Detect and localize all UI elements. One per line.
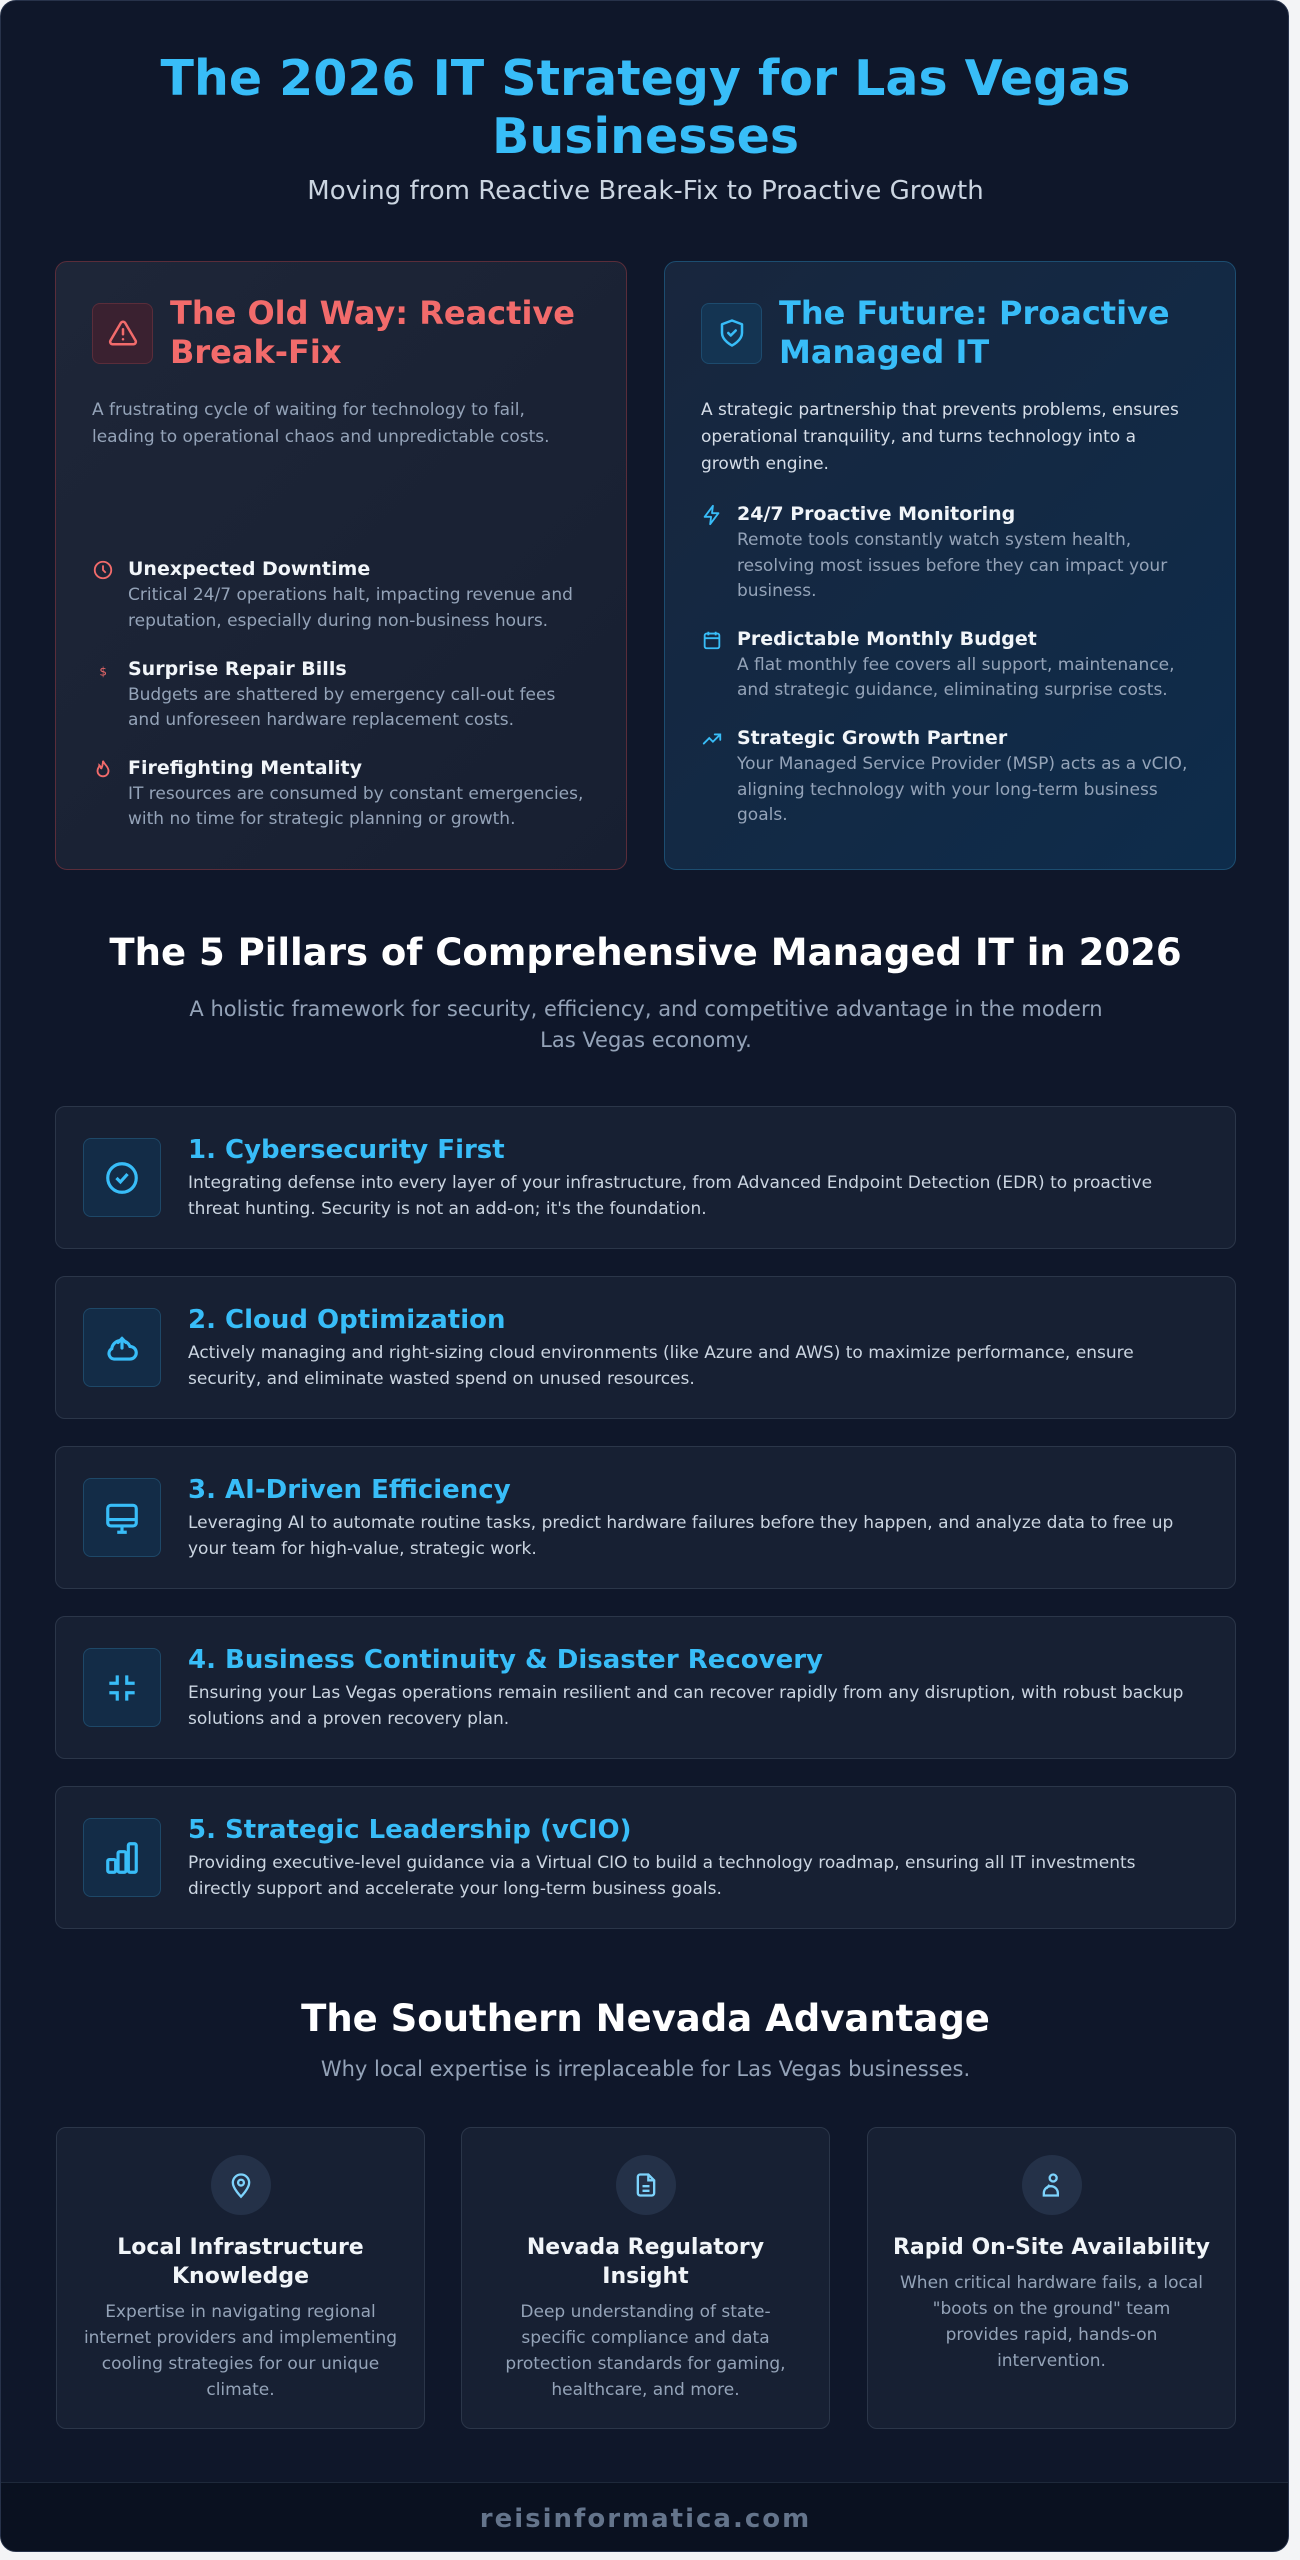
pillar 2 <box>55 1276 1236 1419</box>
item: budget: A flat monthly fee covers all support, maintenance, and strategic guidance, eliminating surprise costs. <box>737 655 1175 700</box>
icon: warning <box>92 302 153 364</box>
item: growth: Strategic Growth Partner <box>737 727 1007 749</box>
card: on-site: "boots on the ground" team <box>933 2299 1170 2319</box>
pillar 1: 1. Cybersecurity First <box>188 1135 505 1165</box>
card: local infrastructure: cooling strategies for our unique <box>102 2354 379 2374</box>
card: local infrastructure <box>56 2127 425 2429</box>
pillar 4: 4. Business Continuity & Disaster Recovery <box>188 1645 823 1675</box>
item: firefighting: IT resources are consumed by constant emergencies, with no time for strategic planning or growth. <box>128 784 583 829</box>
card: on-site: intervention. <box>997 2351 1106 2371</box>
title: Businesses <box>492 108 799 165</box>
item: repair bills <box>99 658 555 730</box>
pillar 4 <box>55 1616 1236 1759</box>
pillar 5 <box>55 1786 1236 1929</box>
card: local infrastructure: Knowledge <box>172 2264 309 2289</box>
future description: A strategic partnership that prevents problems, ensures operational tranquility, and turns technology into a growth engine. <box>701 400 1179 474</box>
item: downtime: Critical 24/7 operations halt, impacting revenue and reputation, especially during non-business hours. <box>128 585 573 631</box>
title <box>160 50 1130 165</box>
item: firefighting: Firefighting Mentality <box>128 757 362 779</box>
pillar 2: Actively managing and right-sizing cloud environments (like Azure and AWS) to maximize performance, ensure security, and eliminate wasted spend on unused resources. <box>188 1343 1134 1389</box>
pillar 1: Integrating defense into every layer of your infrastructure, from Advanced Endpoint Detection (EDR) to proactive threat hunting. Security is not an add-on; it's the foundation. <box>188 1173 1152 1219</box>
item: monitoring: 24/7 Proactive Monitoring <box>737 503 1015 525</box>
future list <box>702 503 1187 825</box>
subtitle: Moving from Reactive Break-Fix to Proactive Growth <box>307 176 984 206</box>
panel: future <box>664 261 1236 870</box>
icon: recover <box>83 1648 161 1727</box>
item: repair bills: Surprise Repair Bills <box>128 658 347 680</box>
pillars subtitle <box>189 997 1103 1052</box>
icon: bar chart <box>83 1818 161 1897</box>
old way header: The Old Way: Reactive Break-Fix <box>170 294 575 371</box>
pillars subtitle: Las Vegas economy. <box>540 1028 752 1052</box>
card: local infrastructure: Expertise in navigating regional <box>105 2302 376 2322</box>
card: regulatory: Insight <box>602 2264 689 2289</box>
old way list <box>94 558 583 829</box>
future header: The Future: Proactive Managed IT <box>779 294 1170 371</box>
pillar 1 <box>55 1106 1236 1249</box>
heading: advantage: The Southern Nevada Advantage <box>301 1997 990 2040</box>
card: regulatory: healthcare, and more. <box>551 2380 740 2400</box>
item: firefighting <box>96 757 583 829</box>
pillar 3 <box>55 1446 1236 1589</box>
item: monitoring <box>704 503 1168 601</box>
title: The 2026 IT Strategy for Las Vegas <box>161 50 1130 107</box>
card: local infrastructure: internet providers and implementing <box>84 2328 397 2348</box>
card: on-site <box>867 2127 1236 2429</box>
item: budget: Predictable Monthly Budget <box>737 628 1037 650</box>
item: downtime <box>94 558 573 631</box>
footer: reisinformatica.com <box>480 2504 811 2534</box>
icon: document <box>616 2155 676 2215</box>
icon: check <box>83 1138 161 1217</box>
footer <box>1 2482 1290 2554</box>
pillar 5: 5. Strategic Leadership (vCIO) <box>188 1815 632 1845</box>
icon: person <box>1022 2155 1082 2215</box>
card: regulatory: Nevada Regulatory <box>527 2235 764 2260</box>
card: regulatory <box>461 2127 830 2429</box>
card: on-site: provides rapid, hands-on <box>946 2325 1157 2345</box>
item: monitoring: Remote tools constantly watch system health, resolving most issues before they can impact your business. <box>737 530 1167 601</box>
item: budget <box>704 628 1175 700</box>
item: downtime: Unexpected Downtime <box>128 558 370 580</box>
card: regulatory: protection standards for gaming, <box>505 2354 786 2374</box>
item: growth <box>702 727 1187 825</box>
icon: shield <box>701 302 762 364</box>
card: regulatory: specific compliance and data <box>521 2328 770 2348</box>
heading: pillars: The 5 Pillars of Comprehensive Managed IT in 2026 <box>109 931 1182 974</box>
item: repair bills: Budgets are shattered by emergency call-out fees and unforeseen hardware replacement costs. <box>128 685 555 730</box>
card: local infrastructure: climate. <box>206 2380 275 2400</box>
icon: pin <box>210 2155 270 2215</box>
item: repair bills: $ <box>99 664 107 678</box>
card: on-site: Rapid On-Site Availability <box>893 2235 1210 2260</box>
pillars subtitle: A holistic framework for security, efficiency, and competitive advantage in the modern <box>189 997 1103 1021</box>
icon: monitor <box>83 1478 161 1557</box>
card: regulatory: Deep understanding of state- <box>520 2302 771 2322</box>
icon: cloud <box>83 1308 161 1387</box>
pillar 5: Providing executive-level guidance via a Virtual CIO to build a technology roadmap, ensuring all IT investments directly support and accelerate your long-term business goals. <box>188 1853 1135 1899</box>
card: on-site: When critical hardware fails, a local <box>900 2273 1203 2293</box>
item: growth: Your Managed Service Provider (MSP) acts as a vCIO, aligning technology with your long-term business goals. <box>737 754 1187 825</box>
old way description: A frustrating cycle of waiting for technology to fail, leading to operational chaos and unpredictable costs. <box>92 400 550 447</box>
card: local infrastructure: Local Infrastructure <box>117 2235 364 2260</box>
pillar 4: Ensuring your Las Vegas operations remain resilient and can recover rapidly from any disruption, with robust backup solutions and a proven recovery plan. <box>188 1683 1183 1729</box>
panel: old way <box>55 261 627 870</box>
advantage subtitle: Why local expertise is irreplaceable for Las Vegas businesses. <box>321 2057 970 2081</box>
pillar 3: 3. AI-Driven Efficiency <box>188 1475 511 1505</box>
pillar 3: Leveraging AI to automate routine tasks, predict hardware failures before they happen, and analyze data to free up your team for high-value, strategic work. <box>188 1513 1173 1559</box>
pillar 2: 2. Cloud Optimization <box>188 1305 506 1335</box>
